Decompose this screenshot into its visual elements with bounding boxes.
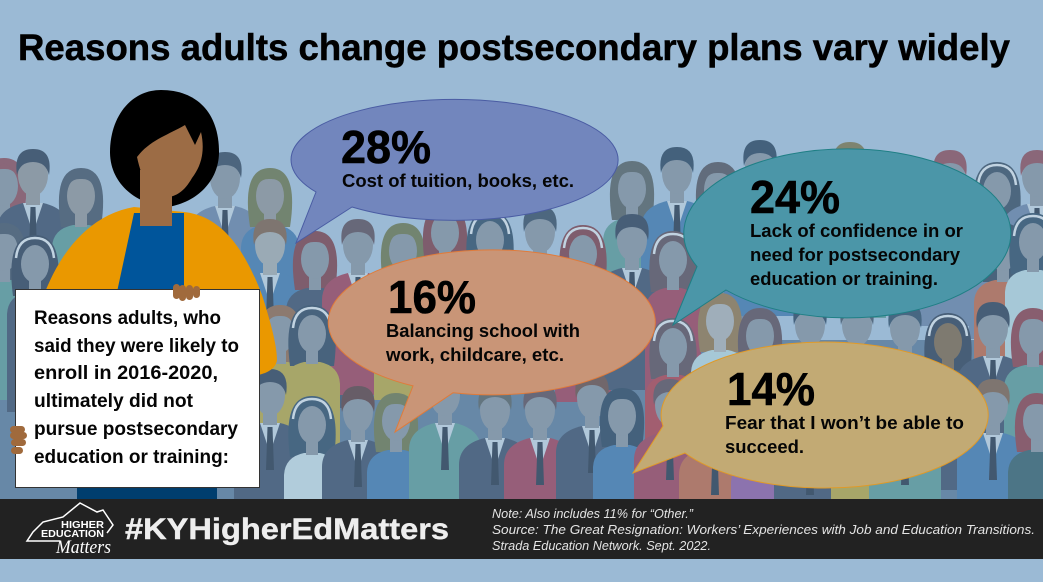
sign panel: pursue postsecondary xyxy=(34,418,238,440)
callout: 14%: succeed. xyxy=(725,436,804,457)
logo: Higher Education Matters xyxy=(27,503,113,558)
footer bar xyxy=(0,499,1043,559)
blue top xyxy=(117,213,184,292)
logo: Higher Education Matters: Matters xyxy=(55,537,111,558)
callout: 24%: 24% xyxy=(750,171,840,223)
source note: Strada Education Network. Sept. 2022. xyxy=(492,538,711,553)
hashtag: #KYHigherEdMatters xyxy=(125,513,449,546)
sign panel: education or training: xyxy=(34,446,229,468)
source note: Source: The Great Resignation: Workers’ Experiences with Job and Education Transitions. xyxy=(492,522,1035,537)
callout: 28%: 28% xyxy=(341,121,431,173)
hand: top of sign xyxy=(173,284,200,301)
sign panel: Reasons adults, who xyxy=(34,307,221,329)
title: Reasons adults change postsecondary plans vary widely xyxy=(18,27,1010,68)
callout: 16% xyxy=(328,250,655,432)
callout: 24% xyxy=(673,149,1011,325)
cardigan xyxy=(45,207,277,375)
sign panel xyxy=(16,290,260,488)
hair xyxy=(110,90,219,207)
callout: 24%: education or training. xyxy=(750,268,938,289)
source note: Note: Also includes 11% for “Other.” xyxy=(492,506,694,521)
callout: 14%: Fear that I won’t be able to xyxy=(725,412,964,433)
callout: 14% xyxy=(633,342,988,488)
sign panel: said they were likely to xyxy=(34,335,239,357)
logo: Higher Education Matters: HIGHER xyxy=(61,519,104,531)
callout: 16%: Balancing school with xyxy=(386,320,580,341)
hand: left of sign xyxy=(10,426,27,454)
callout: 14%: 14% xyxy=(727,363,815,415)
callout: 24%: Lack of confidence in or xyxy=(750,220,963,241)
callout: 16%: work, childcare, etc. xyxy=(385,344,564,365)
callout: 28%: Cost of tuition, books, etc. xyxy=(342,170,574,191)
source note xyxy=(492,506,1035,553)
callout: 28% xyxy=(291,99,618,243)
sign panel: ultimately did not xyxy=(34,390,193,412)
logo: Higher Education Matters: EDUCATION xyxy=(41,528,104,540)
figure: woman holding sign xyxy=(45,90,277,499)
callout: 16%: 16% xyxy=(388,271,476,323)
lower garment xyxy=(77,485,217,499)
callout: 24%: need for postsecondary xyxy=(750,244,961,265)
crowd of people illustration xyxy=(0,140,1043,499)
neck and face xyxy=(137,125,203,226)
sign panel: enroll in 2016-2020, xyxy=(34,362,218,384)
